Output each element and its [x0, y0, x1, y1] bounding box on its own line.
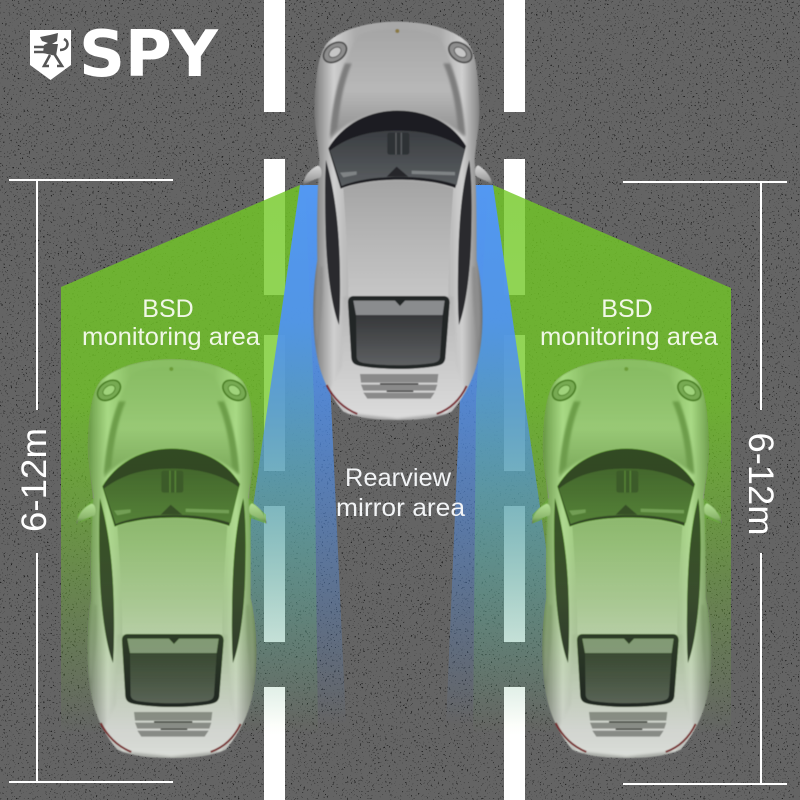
panel: right BSD monitoring zone: [473, 185, 731, 735]
logo: SPY: [30, 18, 219, 92]
car: centre vehicle: [303, 22, 493, 420]
dimension: right 6-12m bracket: [623, 182, 787, 784]
panel: left rearview mirror beam: [221, 185, 346, 725]
label: rearview mirror area: Rearview: [345, 464, 452, 492]
label: right BSD monitoring area: monitoring area: [540, 323, 718, 351]
label: rearview mirror area: mirror area: [336, 494, 465, 522]
panel: right rearview mirror beam: [446, 185, 572, 725]
panel: left BSD monitoring zone: [61, 185, 318, 735]
dimension label: left: 6-12m: [15, 428, 54, 532]
lane markings: [264, 0, 525, 800]
label: right BSD monitoring area: BSD: [601, 295, 653, 323]
label: left BSD monitoring area: [82, 295, 260, 351]
label: left BSD monitoring area: BSD: [142, 295, 194, 323]
dimension label: right: 6-12m: [741, 432, 780, 536]
dimension: left 6-12m bracket: [9, 180, 173, 782]
car: left rear vehicle: [76, 359, 267, 759]
logo wordmark: SPY: [79, 18, 219, 92]
label: right BSD monitoring area: [540, 295, 718, 351]
label: rearview mirror area: [336, 464, 465, 522]
label: left BSD monitoring area: monitoring area: [82, 323, 260, 351]
icon: lion shield: [30, 30, 71, 80]
car: right rear vehicle: [532, 359, 722, 759]
